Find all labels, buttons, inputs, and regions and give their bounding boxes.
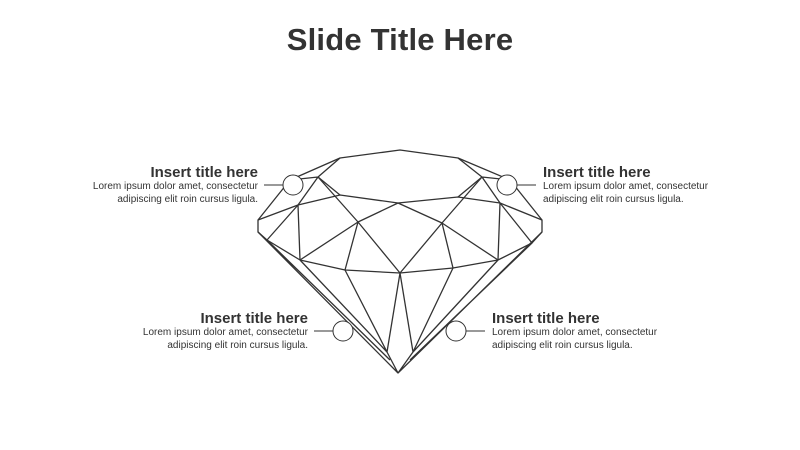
text: top right [543,164,708,204]
text: bottom right [492,310,657,350]
text: bottom left: adipiscing elit roin cursus ligula. [167,340,308,350]
connector lines [264,185,536,331]
text: bottom right: Lorem ipsum dolor amet, consectetur [492,327,657,338]
marker circles [283,175,517,341]
text: bottom left [143,310,308,350]
title: Slide Title Here [287,22,513,57]
text: bottom right: adipiscing elit roin cursus ligula. [492,340,633,350]
text: top left [93,164,258,204]
text: top left: Lorem ipsum dolor amet, consectetur [93,181,258,192]
text: top right: Insert title here [543,164,651,181]
text: top left: Insert title here [150,164,258,181]
text: bottom left: Insert title here [200,310,308,327]
text: top right: adipiscing elit roin cursus ligula. [543,194,684,204]
text: top left: adipiscing elit roin cursus ligula. [117,194,258,204]
text: bottom left: Lorem ipsum dolor amet, consectetur [143,327,308,338]
text: top right: Lorem ipsum dolor amet, consectetur [543,181,708,192]
text: bottom right: Insert title here [492,310,600,327]
